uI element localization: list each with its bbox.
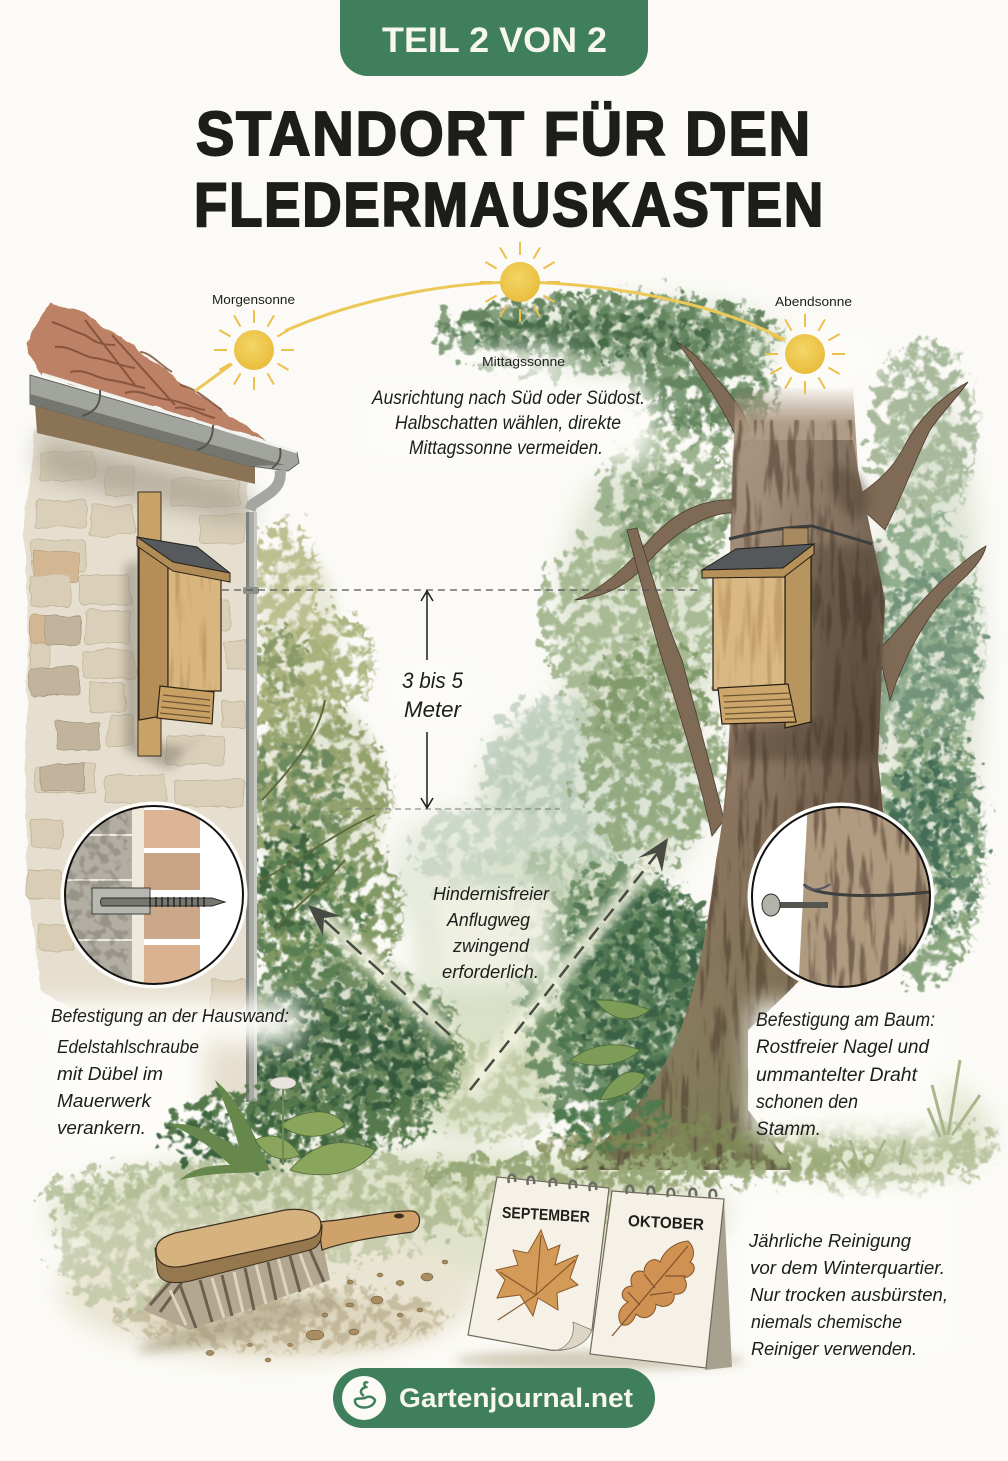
ground wash [40,1075,1000,1360]
branches [575,342,986,836]
text: mounting height: 3 bis 5 [402,668,464,693]
text: wall mounting: verankern. [57,1118,146,1138]
text: wall mounting: Befestigung an der Hauswand: [51,1006,289,1026]
landing board [718,684,796,724]
fascia board [35,404,255,484]
box front [168,568,221,691]
trunk body [570,388,887,1170]
mounting board [138,492,161,756]
height dashed lines [222,590,700,809]
trunk shadow below box [730,545,880,760]
pale background foliage [380,685,700,1140]
height arrows [421,591,433,808]
house wall [24,428,248,1100]
logo icon: sprout in pot [355,1382,375,1408]
text: orientation: Mittagssonne vermeiden. [409,438,603,459]
downspout [243,470,280,1102]
bat box on wall [125,492,230,770]
text: yearly cleaning: Jährliche Reinigung [748,1231,911,1251]
box side [785,556,811,728]
badge text: TEIL 2 VON 2 [382,21,607,60]
brush [135,1209,420,1362]
month label: SEPTEMBER [502,1205,591,1226]
text: yearly cleaning: vor dem Winterquartier. [750,1258,945,1278]
text: tree mounting: Befestigung am Baum: [756,1010,935,1031]
logo circle [342,1376,386,1420]
text: orientation: Ausrichtung nach Süd oder Südost. [371,388,645,409]
landing board [157,686,214,724]
foliage: canopy and right side of the oak [435,293,985,1135]
roof with gutter [26,302,299,484]
flight path arrows [308,838,668,1090]
right arrow [470,850,660,1090]
morning sun [214,310,294,390]
trunk branch knot [830,466,870,520]
footer badge [333,1368,655,1428]
month label: OKTOBER [628,1213,705,1234]
brush shadow [135,1288,345,1362]
text: wall mounting [51,1006,289,1138]
text: mounting height [402,668,464,722]
title: STANDORT FÜR DEN [196,100,812,169]
bark section [799,808,929,986]
title [194,100,825,240]
text: yearly cleaning: Reiniger verwenden. [751,1339,917,1359]
oak trunk [540,342,986,1180]
text: orientation [371,388,645,459]
pale clearing behind flight text [430,885,555,985]
page: Oktober [590,1191,724,1368]
bark texture [570,420,887,1170]
text: flight path: erforderlich. [442,962,539,982]
label: noon sun: Mittagssonne [482,354,565,369]
page: September [468,1177,609,1350]
box front [713,577,785,690]
soil crumbs and pebbles [206,1260,448,1362]
screw [100,898,225,906]
text: yearly cleaning [748,1231,948,1359]
text: flight path: zwingend [452,936,530,956]
text: orientation: Halbschatten wählen, direkte [395,413,621,434]
wire [804,884,930,895]
text clearings [35,325,960,1360]
bat box on tree [702,526,872,728]
box roof [702,544,814,570]
calendar stand [705,1198,732,1370]
text: wall mounting: Mauerwerk [57,1091,152,1111]
gutter [30,375,299,471]
title: FLEDERMAUSKASTEN [194,171,825,240]
spiral rings [508,1175,716,1198]
mounting block [783,528,808,546]
handle [318,1211,420,1250]
left arrow [322,918,450,1035]
calendar shadow [455,1350,745,1370]
text: flight path: Anflugweg [446,910,530,930]
wall shadow [125,560,205,770]
sun arc [195,282,785,391]
oak leaf [619,1241,694,1325]
text: flight path [433,884,550,982]
text: tree mounting: ummantelter Draht [756,1065,918,1086]
text: flight path: Hindernisfreier [433,884,550,904]
text: tree mounting: Stamm. [756,1119,821,1140]
top badge [340,0,648,76]
label: morning sun: Morgensonne [212,292,295,307]
box roof [137,537,230,573]
text: mounting height: Meter [404,697,463,722]
text: wall mounting: Edelstahlschraube [57,1037,199,1057]
label: evening sun: Abendsonne [775,294,852,309]
stone section [66,810,132,980]
text: tree mounting: schonen den [756,1092,858,1113]
roof tiles [26,302,268,441]
arrow halo [310,840,668,1090]
detail circle: wall anchor [60,800,245,990]
bristles [143,1240,330,1330]
mortar [132,800,144,990]
head top [156,1209,321,1267]
text: yearly cleaning: Nur trocken ausbürsten, [750,1285,948,1305]
text: yearly cleaning: niemals chemische [751,1312,902,1332]
plate [92,888,150,914]
head side [155,1225,322,1283]
detail circle: tree nail [750,800,935,995]
text: wall mounting: mit Dübel im [57,1064,163,1084]
bricks [144,810,200,848]
mossy base [540,1120,800,1180]
strap wire [729,526,872,544]
grass on the right [830,1060,980,1172]
garden plants [160,1000,980,1180]
foliage: left shrub tree [215,520,465,1145]
ground cover over trunk base [425,1138,880,1188]
evening sun [765,314,845,394]
noon sun [480,242,560,322]
footer text: Gartenjournal.net [399,1383,633,1413]
maple leaf [496,1230,578,1316]
calendar [455,1175,745,1370]
text: tree mounting [756,1010,935,1140]
nail [780,902,828,908]
text: tree mounting: Rostfreier Nagel und [756,1037,930,1058]
box side [139,545,168,720]
